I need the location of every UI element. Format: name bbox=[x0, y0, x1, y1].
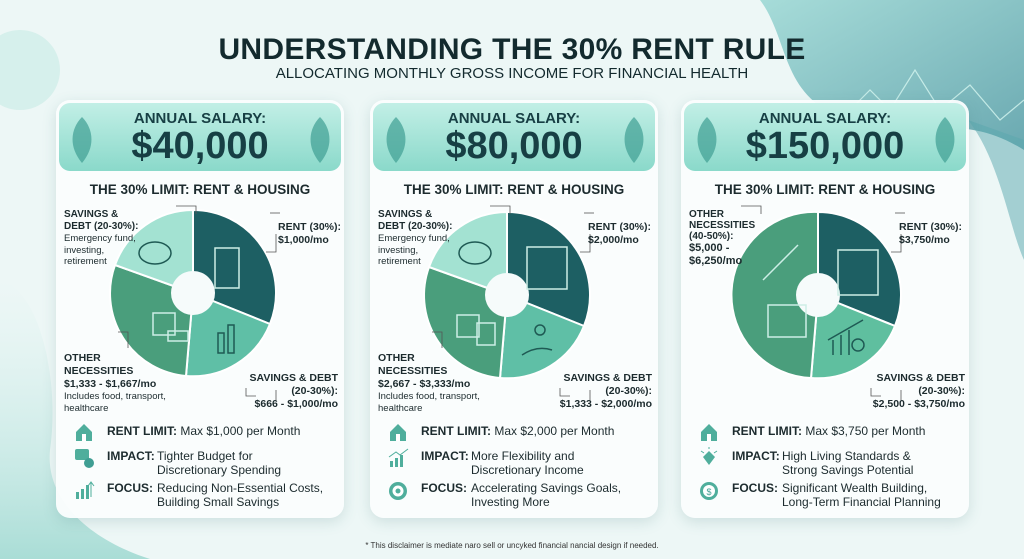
label: rent: $3,750/mo bbox=[899, 234, 950, 246]
label: savings bottom-right: (20-30%): bbox=[291, 385, 338, 397]
label: rent bbox=[899, 221, 962, 246]
label: savings top-left: Emergency fund, bbox=[64, 233, 136, 244]
label: other necessities bbox=[378, 352, 480, 414]
label: savings top-left: SAVINGS & bbox=[378, 209, 432, 220]
label: other necessities: NECESSITIES bbox=[689, 220, 755, 231]
row: impact bbox=[388, 448, 584, 476]
label: savings bottom-right: SAVINGS & DEBT bbox=[877, 372, 965, 384]
salary header: ANNUAL SALARY: bbox=[134, 110, 266, 127]
label: savings bottom-right: SAVINGS & DEBT bbox=[250, 372, 338, 384]
label: savings top-left: investing, bbox=[378, 244, 418, 256]
label: savings top-left: DEBT (20-30%): bbox=[64, 221, 138, 232]
panel: $150,000: Significant Wealth Building, bbox=[782, 481, 927, 495]
label: rent: $2,000/mo bbox=[588, 234, 639, 246]
panel: $150,000: Long-Term Financial Planning bbox=[782, 494, 941, 508]
subheading: THE 30% LIMIT: RENT & HOUSING bbox=[715, 182, 935, 197]
label: savings bottom-right: $2,500 - $3,750/mo bbox=[873, 398, 965, 410]
label: savings bottom-right: SAVINGS & DEBT bbox=[564, 372, 652, 384]
panel: $40,000: Reducing Non-Essential Costs, bbox=[157, 481, 323, 495]
label: other necessities: $2,667 - $3,333/mo bbox=[378, 378, 470, 390]
label: other necessities: Includes food, transport, bbox=[378, 391, 480, 402]
subheading: THE 30% LIMIT: RENT & HOUSING bbox=[404, 182, 624, 197]
salary header: ANNUAL SALARY: bbox=[759, 110, 891, 127]
label: other necessities: $6,250/mo bbox=[689, 255, 742, 267]
panel: $80,000: Investing More bbox=[471, 494, 550, 508]
panel: $40,000 bbox=[56, 100, 344, 518]
label: other necessities: OTHER bbox=[378, 352, 415, 364]
subtitle: ALLOCATING MONTHLY GROSS INCOME FOR FINANCIAL HEALTH bbox=[276, 65, 748, 82]
label: other necessities: OTHER bbox=[64, 352, 101, 364]
panel: $80,000 bbox=[370, 100, 658, 518]
label: other necessities: OTHER bbox=[689, 209, 724, 220]
panel: $40,000: FOCUS: bbox=[107, 481, 153, 495]
panel: $150,000: RENT LIMIT: Max $3,750 per Month bbox=[732, 424, 925, 438]
label: rent: RENT (30%): bbox=[899, 221, 962, 233]
label: savings bottom-right bbox=[250, 372, 338, 410]
panel: $150,000: Strong Savings Potential bbox=[782, 462, 913, 476]
label: rent bbox=[588, 221, 651, 246]
panel: $40,000: IMPACT: bbox=[107, 449, 155, 463]
row: focus bbox=[389, 481, 621, 508]
label: savings top-left: DEBT (20-30%): bbox=[378, 221, 452, 232]
panel: $150,000: FOCUS: bbox=[732, 481, 778, 495]
panel: $80,000: RENT LIMIT: Max $2,000 per Month bbox=[421, 424, 614, 438]
panel: $80,000: IMPACT: bbox=[421, 449, 469, 463]
row: impact bbox=[700, 447, 913, 476]
label: other necessities: healthcare bbox=[378, 402, 422, 414]
label: rent: RENT (30%): bbox=[278, 221, 341, 233]
salary header: $80,000 bbox=[445, 125, 583, 167]
panel: $40,000: RENT LIMIT: Max $1,000 per Month bbox=[107, 424, 300, 438]
label: other necessities: $1,333 - $1,667/mo bbox=[64, 378, 156, 390]
panel: $150,000 bbox=[681, 100, 969, 518]
row: focus bbox=[700, 481, 941, 508]
row: rent limit bbox=[76, 424, 300, 441]
salary header: $150,000 bbox=[746, 125, 904, 167]
label: other necessities: NECESSITIES bbox=[64, 365, 133, 377]
label: other necessities: Includes food, transport, bbox=[64, 391, 166, 402]
salary header bbox=[59, 103, 341, 171]
label: other necessities: (40-50%): bbox=[689, 231, 733, 242]
row: focus bbox=[76, 481, 323, 508]
title: UNDERSTANDING THE 30% RENT RULE bbox=[218, 33, 806, 66]
row: rent limit bbox=[701, 424, 925, 441]
label: savings bottom-right bbox=[560, 372, 652, 410]
label: savings bottom-right: $666 - $1,000/mo bbox=[255, 398, 338, 410]
disclaimer: * This disclaimer is mediate naro sell or uncyked financial nancial design if needed. bbox=[365, 541, 659, 550]
pie chart bbox=[732, 206, 905, 400]
salary header bbox=[373, 103, 655, 171]
label: savings bottom-right bbox=[872, 372, 965, 410]
label: savings top-left bbox=[64, 209, 138, 267]
panel: $40,000: Tighter Budget for bbox=[157, 449, 253, 463]
row: impact bbox=[75, 449, 281, 476]
panel: $40,000: Discretionary Spending bbox=[157, 462, 281, 476]
panel: $80,000: Discretionary Income bbox=[471, 462, 584, 476]
label: rent: RENT (30%): bbox=[588, 221, 651, 233]
label: savings top-left: investing, bbox=[64, 244, 104, 256]
label: savings top-left: retirement bbox=[378, 256, 421, 267]
panel: $80,000: FOCUS: bbox=[421, 481, 467, 495]
label: savings bottom-right: $1,333 - $2,000/mo bbox=[560, 398, 652, 410]
label: savings bottom-right: (20-30%): bbox=[605, 385, 652, 397]
label: savings top-left: SAVINGS & bbox=[64, 209, 118, 220]
panel: $150,000: High Living Standards & bbox=[782, 449, 911, 463]
salary header bbox=[684, 103, 966, 171]
label: other necessities bbox=[689, 209, 755, 267]
label: savings top-left bbox=[378, 209, 452, 267]
label: rent bbox=[278, 221, 341, 246]
label: savings top-left: Emergency fund, bbox=[378, 233, 450, 244]
label: rent: $1,000/mo bbox=[278, 234, 329, 246]
pie chart bbox=[425, 206, 594, 400]
panel: $40,000: Building Small Savings bbox=[157, 494, 279, 508]
label: savings bottom-right: (20-30%): bbox=[918, 385, 965, 397]
label: other necessities: healthcare bbox=[64, 402, 108, 414]
panel: $150,000: IMPACT: bbox=[732, 449, 780, 463]
label: savings top-left: retirement bbox=[64, 256, 107, 267]
label: other necessities bbox=[64, 352, 166, 414]
salary header: ANNUAL SALARY: bbox=[448, 110, 580, 127]
panel: $80,000: More Flexibility and bbox=[471, 449, 574, 463]
row: rent limit bbox=[390, 424, 614, 441]
salary header: $40,000 bbox=[131, 125, 269, 167]
pie chart bbox=[111, 206, 280, 400]
label: other necessities: NECESSITIES bbox=[378, 365, 447, 377]
label: other necessities: $5,000 - bbox=[689, 242, 729, 254]
subheading: THE 30% LIMIT: RENT & HOUSING bbox=[90, 182, 310, 197]
panel: $150,000: $ bbox=[706, 487, 712, 497]
panel: $80,000: Accelerating Savings Goals, bbox=[471, 481, 621, 495]
